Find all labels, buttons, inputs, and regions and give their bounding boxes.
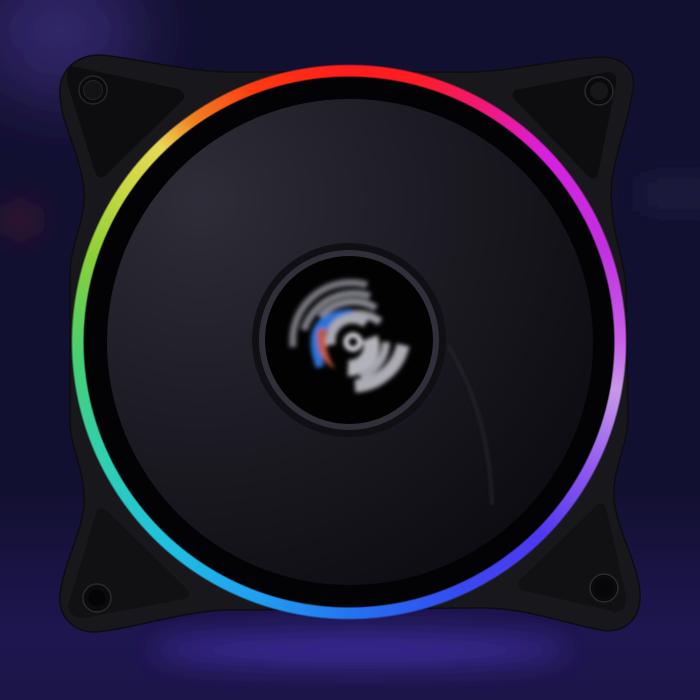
corner panel: bottom left — [68, 508, 189, 618]
RGB LED ring — [71, 64, 627, 620]
icon: spinning logo — [293, 283, 403, 386]
icon: screw hole bottom right — [590, 574, 618, 602]
blade disc — [107, 99, 593, 585]
frame — [60, 55, 640, 632]
corner panel: top left — [67, 66, 184, 177]
hub — [252, 243, 446, 437]
ring glow — [71, 64, 627, 620]
icon: screw hole top right — [585, 77, 613, 105]
corner panel: top right — [512, 72, 616, 179]
icon: screw hole bottom left — [83, 584, 111, 612]
blade streak — [448, 345, 492, 505]
ring channel — [77, 70, 621, 614]
corner panel: bottom right — [518, 503, 626, 612]
icon: screw hole top left — [79, 76, 107, 104]
